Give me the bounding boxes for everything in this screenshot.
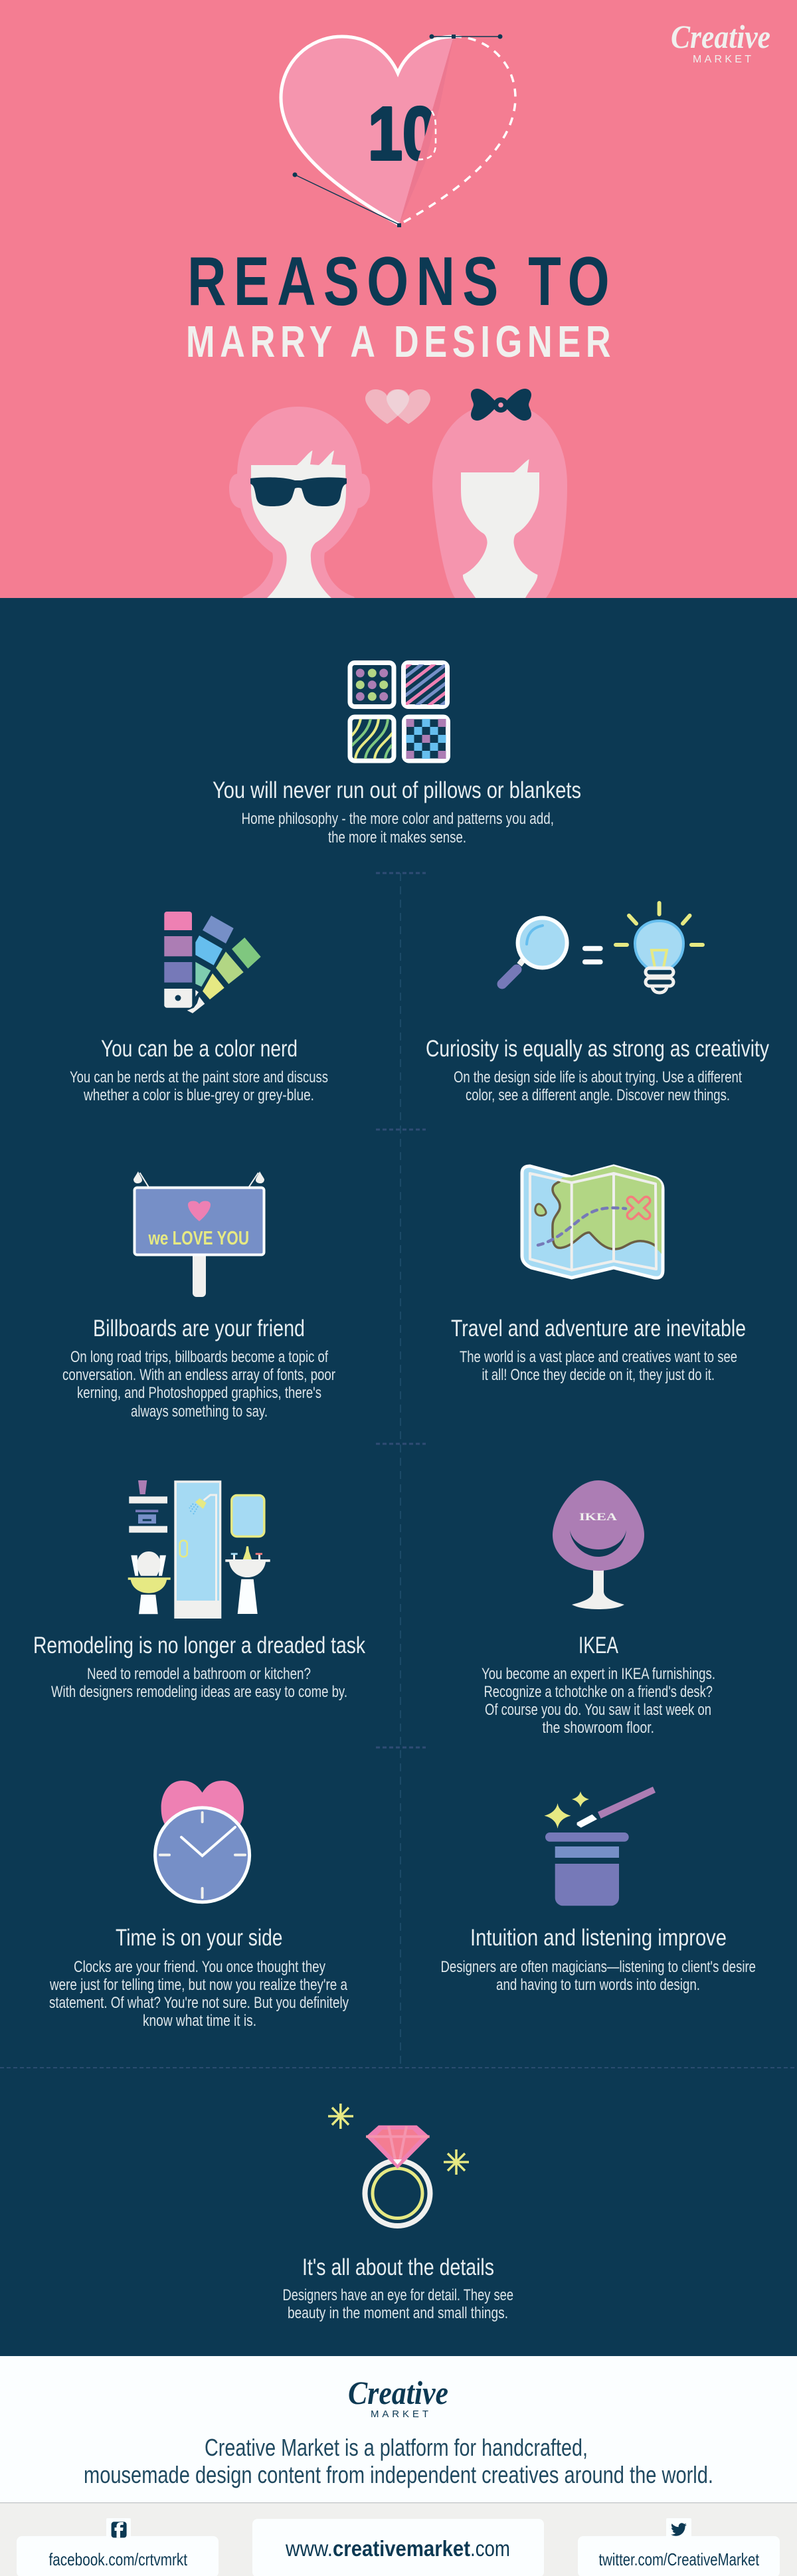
text block <box>51 1665 347 1701</box>
text block: conversation. With an endless array of fonts, poor <box>62 1366 335 1384</box>
icon: egg chair <box>553 1480 644 1609</box>
website link <box>252 2519 544 2576</box>
billboard text: we LOVE YOU <box>148 1228 249 1249</box>
panel: reason details <box>283 2104 513 2322</box>
icon: folded treasure map <box>522 1166 663 1278</box>
heading: IKEA <box>578 1633 618 1658</box>
text block: statement. Of what? You're not sure. But you definitely <box>49 1994 349 2012</box>
icon: clock with heart <box>155 1781 250 1902</box>
text block <box>49 1958 349 2030</box>
text block: You become an expert in IKEA furnishings. <box>482 1665 715 1683</box>
panel: about Creative Market <box>0 2356 797 2503</box>
heading: You will never run out of pillows or blankets <box>213 777 581 803</box>
text block: the more it makes sense. <box>328 829 466 846</box>
chair label: IKEA <box>579 1512 618 1523</box>
text block: beauty in the moment and small things. <box>288 2304 508 2322</box>
panel: reason intuition <box>441 1787 756 1994</box>
text block <box>460 1348 737 1384</box>
text block <box>441 1958 756 1994</box>
website link: creativemarket <box>333 2536 470 2561</box>
heading: Remodeling is no longer a dreaded task <box>33 1633 365 1658</box>
panel: reason pillows <box>213 660 580 842</box>
text block <box>70 1068 328 1104</box>
facebook link <box>17 2518 219 2576</box>
panel: reason remodeling <box>33 1480 365 1701</box>
icon: billboard <box>133 1171 264 1297</box>
text block: the showroom floor. <box>542 1719 654 1737</box>
text block <box>242 810 554 846</box>
text block: With designers remodeling ideas are easy to come by. <box>51 1683 347 1701</box>
icon: overlapping hearts <box>365 389 430 424</box>
logo: Creative Market white: Creative <box>671 18 770 55</box>
website link: www. <box>285 2536 333 2561</box>
icon: magic hat and wand <box>545 1787 656 1906</box>
text block: were just for telling time, but now you realize they're a <box>49 1976 348 1994</box>
text block: know what time it is. <box>143 2012 256 2030</box>
text block <box>283 2286 513 2322</box>
heading: Time is on your side <box>116 1925 283 1951</box>
text block: kerning, and Photoshopped graphics, there's <box>77 1384 321 1402</box>
text block: You can be nerds at the paint store and discuss <box>70 1068 328 1086</box>
icon: bathroom <box>128 1480 270 1619</box>
illustration: man with sunglasses <box>229 407 370 598</box>
heading: Intuition and listening improve <box>470 1925 727 1951</box>
panel: reasons background <box>0 598 797 2356</box>
panel: reason curiosity <box>426 903 769 1104</box>
icon: half-drawn heart with bezier handles <box>281 35 515 227</box>
icon: hair bow <box>471 389 531 421</box>
icon: colour swatch fan <box>164 912 261 1013</box>
heading: It's all about the details <box>302 2254 494 2280</box>
icon: patterned pillows <box>348 660 450 763</box>
illustration: woman with bow <box>432 389 567 598</box>
text block: it all! Once they decide on it, they just do it. <box>482 1366 715 1384</box>
twitter link <box>578 2518 780 2576</box>
icon: billboard heart <box>188 1201 211 1221</box>
description <box>84 2434 713 2488</box>
description: Creative Market is a platform for handcrafted, <box>205 2434 588 2461</box>
panel: reason IKEA <box>482 1480 715 1737</box>
panel: hero <box>0 0 797 598</box>
subtitle: marry a designer: MARRY A DESIGNER <box>186 317 611 366</box>
icon: diamond ring <box>328 2104 469 2226</box>
heading: Billboards are your friend <box>93 1316 305 1341</box>
heading: You can be a color nerd <box>101 1036 298 1062</box>
panel: reason billboards <box>62 1171 335 1421</box>
text block <box>482 1665 715 1737</box>
text block: and having to turn words into design. <box>496 1976 700 1994</box>
text block: Designers have an eye for detail. They see <box>283 2286 513 2304</box>
text block <box>62 1348 335 1421</box>
facebook link: facebook.com/crtvmrkt <box>49 2549 188 2569</box>
text block: whether a color is blue-grey or grey-blue. <box>83 1086 314 1104</box>
website link: .com <box>470 2536 510 2561</box>
logo: Creative Market navy: MARKET <box>371 2409 428 2420</box>
panel: reason time <box>49 1781 349 2030</box>
text block: Of course you do. You saw it last week on <box>485 1701 711 1719</box>
panel: reason travel <box>451 1166 746 1384</box>
text block: Recognize a tchotchke on a friend's desk? <box>484 1683 713 1701</box>
text block: Home philosophy - the more color and patterns you add, <box>242 810 554 828</box>
text block: Clocks are your friend. You once thought they <box>74 1958 325 1976</box>
panel: reason color nerd <box>70 912 328 1104</box>
icon: half-drawn heart with bezier handles: 10 <box>368 92 437 175</box>
text block <box>454 1068 742 1104</box>
text block: Need to remodel a bathroom or kitchen? <box>87 1665 311 1683</box>
logo: Creative Market navy: Creative <box>348 2374 448 2411</box>
icon: sunglasses <box>250 477 347 506</box>
panel: footer links <box>0 2502 797 2576</box>
text block: On long road trips, billboards become a topic of <box>70 1348 328 1366</box>
title: reasons to: REASONS TO <box>187 243 610 320</box>
icon: twitter bird <box>671 2523 687 2536</box>
text block: always something to say. <box>131 1403 268 1421</box>
logo: Creative Market white: MARKET <box>693 54 751 65</box>
icon: magnifier equals light bulb <box>502 903 703 993</box>
icon: facebook <box>112 2522 127 2537</box>
